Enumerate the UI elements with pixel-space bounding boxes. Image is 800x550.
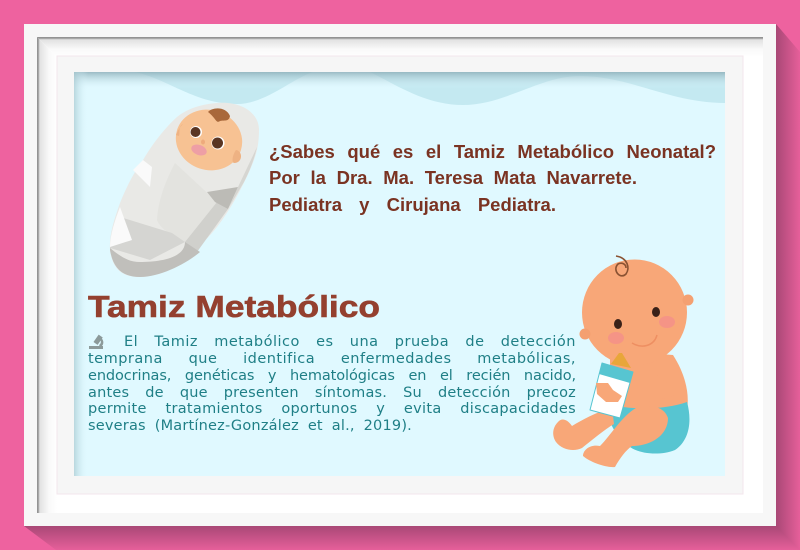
body paragraph: temprana que identifica enfermedades metabólicas, — [88, 351, 576, 367]
icon: baby with bottle — [553, 256, 694, 467]
author specialty: Pediatra y Cirujana Pediatra. — [269, 194, 556, 215]
light blue panel — [74, 72, 725, 476]
icon: swaddled baby — [110, 101, 259, 277]
author name: Por la Dra. Ma. Teresa Mata Navarrete. — [269, 167, 637, 188]
body paragraph: permite tratamientos oportunos y evita discapacidades — [88, 401, 576, 417]
body paragraph: endocrinas, genéticas y hematológicas en el recién nacido, — [88, 368, 576, 384]
icon: microscope — [89, 335, 103, 349]
body paragraph: El Tamiz metabólico es una prueba de detección — [124, 334, 576, 350]
body paragraph — [88, 334, 576, 434]
heading question: ¿Sabes qué es el Tamiz Metabólico Neonatal? — [269, 141, 716, 162]
body paragraph: severas (Martínez-González et al., 2019). — [88, 418, 412, 434]
body paragraph: antes de que presenten síntomas. Su detección precoz — [88, 384, 576, 400]
heading: Tamiz Metabólico: Tamiz Metabólico — [88, 289, 380, 324]
